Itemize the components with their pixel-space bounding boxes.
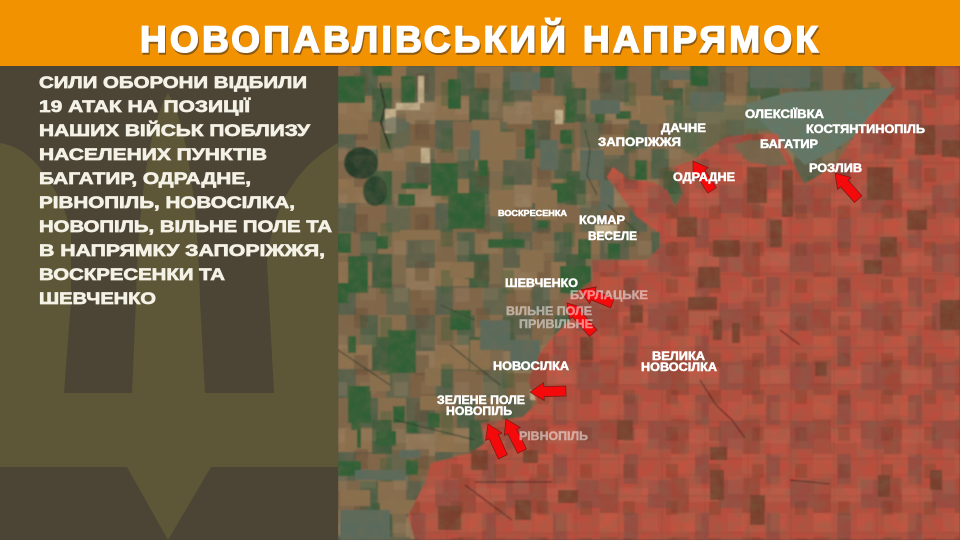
map [338, 66, 960, 540]
arrow: Бурлацьке [580, 286, 615, 308]
arrow: Новопіль right [504, 418, 527, 454]
map labels: ВЕЛИКА [652, 351, 705, 363]
map labels: НОВОСІЛКА [641, 362, 717, 374]
map labels: БАГАТИР [760, 139, 818, 151]
map labels: НОВОПІЛЬ [446, 406, 512, 418]
map labels: ЗАПОРІЖЖЯ [598, 137, 681, 149]
header bar [0, 0, 960, 66]
map labels [437, 108, 925, 443]
grey-green settlement area [745, 88, 895, 165]
arrow: Розлив [834, 172, 862, 203]
map labels: РІВНОПІЛЬ [519, 431, 588, 443]
text block: attacks summary: НАШИХ ВІЙСЬК ПОБЛИЗУ [39, 121, 311, 140]
rivers [380, 83, 390, 149]
icon: trident emblem background [0, 93, 338, 540]
arrow: Вільне Поле [566, 302, 598, 337]
arrow: Одрадне [692, 160, 717, 194]
map texture [338, 66, 960, 540]
arrow: Новосілка [530, 382, 566, 401]
map labels: ОЛЕКСІЇВКА [745, 108, 824, 121]
map labels: ВЕСЕЛЕ [588, 231, 637, 243]
map labels: ВІЛЬНЕ ПОЛЕ [506, 306, 592, 318]
panel: left text panel [0, 66, 338, 540]
text block: attacks summary [39, 73, 332, 308]
arrow: Новопіль left [485, 424, 508, 460]
text block: attacks summary: 19 АТАК НА ПОЗИЦІЇ [39, 97, 252, 116]
map labels: РОЗЛИВ [809, 163, 862, 175]
text block: attacks summary: ШЕВЧЕНКО [39, 289, 156, 308]
pocket under Bagatyr [733, 140, 788, 166]
map labels: ДАЧНЕ [661, 123, 706, 135]
map labels: НОВОСІЛКА [493, 361, 569, 373]
text block: attacks summary: РІВНОПІЛЬ, НОВОСІЛКА, [39, 193, 295, 212]
text block: attacks summary: ВОСКРЕСЕНКИ ТА [39, 265, 225, 284]
red occupied zone [408, 66, 960, 540]
title: НОВОПАВЛІВСЬКИЙ НАПРЯМОК [140, 18, 818, 60]
map labels: ПРИВІЛЬНЕ [519, 319, 593, 331]
map labels: КОСТЯНТИНОПІЛЬ [806, 124, 925, 136]
map labels: ШЕВЧЕНКО [505, 278, 578, 290]
map labels: КОМАР [579, 215, 625, 227]
text block: attacks summary: БАГАТИР, ОДРАДНЕ, [39, 169, 251, 188]
map labels: ВОСКРЕСЕНКА [498, 208, 567, 218]
map labels: ОДРАДНЕ [673, 172, 735, 184]
text block: attacks summary: НАСЕЛЕНИХ ПУНКТІВ [39, 145, 267, 164]
text block: attacks summary: СИЛИ ОБОРОНИ ВІДБИЛИ [39, 73, 307, 92]
map labels: БУРЛАЦЬКЕ [570, 290, 648, 302]
text block: attacks summary: НОВОПІЛЬ, ВІЛЬНЕ ПОЛЕ ТА [39, 217, 332, 236]
map labels: ЗЕЛЕНЕ ПОЛЕ [437, 395, 525, 407]
text block: attacks summary: В НАПРЯМКУ ЗАПОРІЖЖЯ, [39, 241, 325, 260]
